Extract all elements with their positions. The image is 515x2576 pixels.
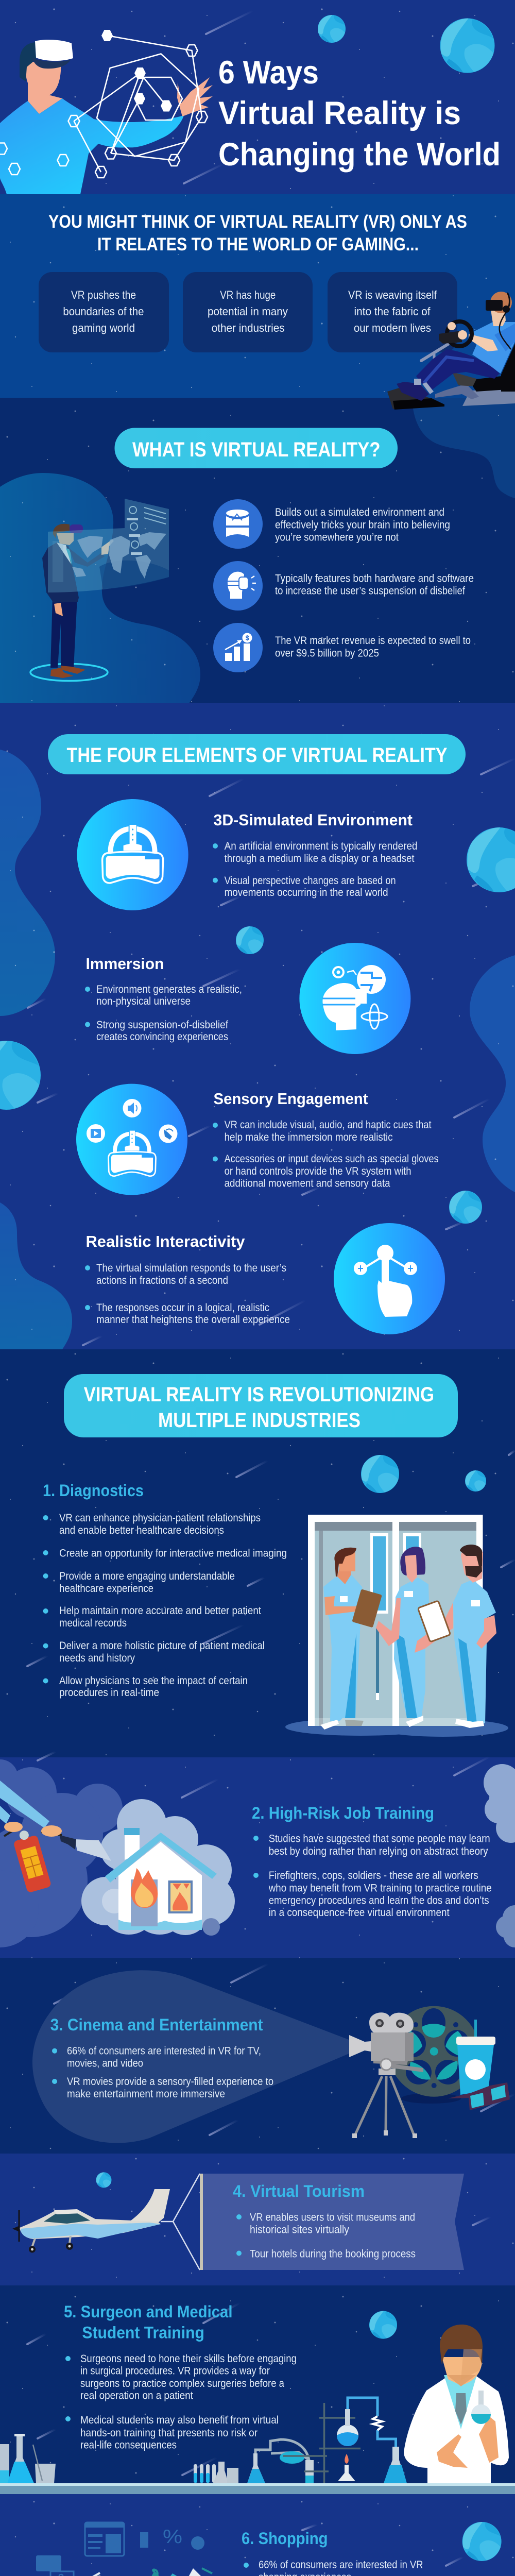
section: diagnostics: procedures in real-time <box>59 1687 159 1699</box>
section: diagnostics: Provide a more engaging understandable <box>59 1570 235 1582</box>
section: diagnostics <box>43 1481 287 1699</box>
section: high-risk job training: in a consequence-free virtual environment <box>269 1907 450 1919</box>
panel: card gaming <box>39 272 169 352</box>
section: shopping <box>242 2529 451 2576</box>
icon: planet tourism <box>96 2172 111 2188</box>
icon: planet diagnostics large <box>361 1455 399 1493</box>
text: hardware and software: to increase the user’s suspension of disbelief <box>275 585 465 597</box>
panel: cinema background <box>0 1958 515 2154</box>
text: simulated environment: you’re somewhere you’re not <box>275 532 399 544</box>
background blob: left of what is VR <box>0 473 200 703</box>
heading: you might think <box>48 212 467 255</box>
panel: job training background <box>0 1757 515 1958</box>
icon: immersion circle <box>299 943 410 1054</box>
panel: card modern lives: our modern lives <box>354 321 431 334</box>
section: diagnostics: and enable better healthcare decisions <box>59 1524 224 1536</box>
panel: virtual tourism banner <box>200 2174 464 2270</box>
panel: intro background <box>0 194 515 398</box>
icon: planet large hero <box>440 19 494 73</box>
element: immersion: Immersion <box>85 955 164 973</box>
background blob: lower left of four elements <box>0 1202 72 1349</box>
section: surgeon and medical student training: Medical students may also benefit from virtual <box>80 2414 279 2426</box>
element: 3D-simulated environment: An artificial environment is typically rendered <box>225 840 418 852</box>
section: surgeon and medical student training: hands-on training that presents no risk or <box>80 2427 258 2439</box>
background blob: upper left of four elements <box>0 750 55 1016</box>
section: diagnostics: medical records <box>59 1617 127 1629</box>
panel: hero background <box>0 0 515 194</box>
element: realistic interactivity <box>85 1232 290 1326</box>
icon: revenue bars badge: $ <box>246 634 250 642</box>
panel: card industries: VR has huge <box>220 289 276 301</box>
icon: revenue bars badge <box>213 623 263 672</box>
title: 6 Ways <box>218 55 319 91</box>
text: hardware and software: Typically features both hardware and software <box>275 573 474 584</box>
text: market revenue: The VR market revenue is expected to swell to <box>275 635 471 647</box>
background blob: top right of what is VR <box>412 398 515 498</box>
section: high-risk job training: 2. High-Risk Job Training <box>252 1804 434 1822</box>
section: surgeon and medical student training: surgeons to practice complex surgeries before a <box>80 2378 284 2389</box>
section: diagnostics: Help maintain more accurate and better patient <box>59 1605 261 1617</box>
section: diagnostics: needs and history <box>59 1652 135 1664</box>
heading pill: revolutionizing industries: MULTIPLE INDUSTRIES <box>158 1409 360 1432</box>
section: high-risk job training: who may benefit from VR training to practice routine <box>268 1883 492 1894</box>
heading pill: four elements <box>48 734 466 774</box>
heading: you might think: IT RELATES TO THE WORLD OF GAMING... <box>97 234 419 255</box>
background clouds right <box>484 1764 515 1947</box>
element: realistic interactivity: The responses occur in a logical, realistic <box>96 1302 269 1314</box>
icon: planet shopping <box>462 2522 502 2561</box>
icon: planet left lower <box>0 1041 41 1110</box>
icon: head with headset badge <box>213 561 263 611</box>
text: simulated environment: Builds out a simulated environment and <box>275 506 444 518</box>
heading pill: revolutionizing industries: VIRTUAL REALITY IS REVOLUTIONIZING <box>84 1383 434 1406</box>
panel: card gaming: gaming world <box>72 321 135 334</box>
text: hardware and software <box>275 573 474 597</box>
section: shopping: 6. Shopping <box>242 2529 328 2548</box>
element: immersion: Environment generates a realistic, <box>96 984 242 995</box>
panel: card industries: other industries <box>212 321 285 334</box>
section: surgeon and medical student training <box>64 2302 297 2451</box>
heading pill: what is VR: WHAT IS VIRTUAL REALITY? <box>132 438 380 461</box>
icon: planet small centre <box>236 926 264 954</box>
element: 3D-simulated environment: through a medium like a display or a headset <box>225 853 415 865</box>
icon: VR panorama badge <box>213 499 263 549</box>
section: shopping: 66% of consumers are interested in VR <box>259 2559 423 2571</box>
element: sensory engagement: help make the immersion more realistic <box>225 1131 393 1143</box>
panel: what is VR background <box>0 398 515 703</box>
section: high-risk job training <box>252 1804 492 1919</box>
element: 3D-simulated environment: 3D-Simulated Environment <box>213 811 413 829</box>
element: realistic interactivity: Realistic Interactivity <box>85 1232 245 1250</box>
element: immersion <box>85 955 242 1043</box>
section: cinema and entertainment: 3. Cinema and Entertainment <box>50 2015 263 2034</box>
element: 3D-simulated environment: movements occurring in the real world <box>225 887 388 899</box>
heading pill: four elements: THE FOUR ELEMENTS OF VIRTUAL REALITY <box>67 744 448 767</box>
background cloud left <box>0 1759 123 1947</box>
icon: planet diagnostics small <box>465 1470 486 1492</box>
element: sensory engagement: Accessories or input devices such as special gloves <box>225 1153 439 1165</box>
element: sensory engagement: VR can include visual, audio, and haptic cues that <box>225 1119 432 1131</box>
element: sensory engagement: Sensory Engagement <box>213 1090 368 1108</box>
illustration: gamer in racing rig <box>387 292 515 410</box>
element: 3D-simulated environment: Visual perspective changes are based on <box>225 875 396 887</box>
section: diagnostics: Create an opportunity for interactive medical imaging <box>59 1547 287 1559</box>
panel: virtual tourism banner: historical sites virtually <box>250 2224 349 2236</box>
projector light beam <box>32 1970 350 2143</box>
panel: four elements background <box>0 703 515 1349</box>
icon: 3D headset circle <box>77 799 188 910</box>
icon: planet small hero <box>318 15 346 43</box>
element: immersion: non-physical universe <box>96 995 191 1007</box>
section: high-risk job training: Firefighters, cops, soldiers - these are all workers <box>269 1870 478 1882</box>
illustration: faint shopping icons <box>36 2522 204 2576</box>
element: immersion: creates convincing experiences <box>96 1031 228 1043</box>
section: surgeon and medical student training: Surgeons need to hone their skills before engaging <box>80 2353 297 2365</box>
text: market revenue: over $9.5 billion by 2025 <box>275 648 379 659</box>
banner rope <box>161 2174 200 2270</box>
section: surgeon and medical student training: 5. Surgeon and Medical <box>64 2302 233 2321</box>
background blob: right of four elements <box>470 955 515 1192</box>
illustration: faint shopping icons: % <box>163 2526 182 2548</box>
illustration: airplane <box>12 2189 170 2252</box>
section: surgeon and medical student training: real operation on a patient <box>80 2389 193 2402</box>
illustration: shopping cart with gifts <box>115 2568 222 2576</box>
panel: card modern lives: into the fabric of <box>354 305 431 318</box>
text: market revenue <box>275 635 471 659</box>
section: surgeon and medical student training: in surgical procedures. VR provides a way for <box>80 2365 270 2377</box>
panel: surgeon background <box>0 2285 515 2494</box>
illustration: burning house with extinguisher <box>0 1781 235 1936</box>
panel: card gaming: boundaries of the <box>63 305 144 318</box>
panel: shopping background <box>0 2494 515 2576</box>
panel: virtual tourism banner: VR enables users to visit museums and <box>250 2211 415 2223</box>
panel: card modern lives: VR is weaving itself <box>348 289 437 301</box>
title: Virtual Reality is <box>218 95 461 131</box>
section: surgeon and medical student training: real-life consequences <box>80 2439 177 2451</box>
panel: industries background <box>0 1349 515 1757</box>
section: diagnostics: 1. Diagnostics <box>43 1481 144 1500</box>
illustration: man with holographic world map <box>30 499 169 681</box>
illustration: film camera, reel, drink and glasses <box>349 2006 510 2138</box>
heading pill: revolutionizing industries <box>64 1374 458 1437</box>
section: diagnostics: Deliver a more holistic picture of patient medical <box>59 1640 265 1652</box>
element: realistic interactivity: actions in fractions of a second <box>96 1275 228 1286</box>
element: 3D-simulated environment <box>213 811 418 899</box>
illustration: man in VR headset with hexagon network <box>0 30 213 194</box>
icon: planet right of element one <box>467 827 515 892</box>
section: diagnostics: Allow physicians to see the impact of certain <box>59 1675 248 1687</box>
section: cinema and entertainment: make entertainment more immersive <box>67 2088 225 2100</box>
panel: card gaming: VR pushes the <box>71 289 136 301</box>
icon: sensory circle <box>76 1084 187 1195</box>
section: high-risk job training: best by doing rather than relying on abstract theory <box>269 1845 488 1857</box>
illustration: lab table with glassware <box>0 2398 515 2494</box>
panel: virtual tourism banner: Tour hotels during the booking process <box>250 2248 416 2260</box>
section: cinema and entertainment: movies, and video <box>67 2058 143 2070</box>
icon: touch interaction circle <box>334 1223 445 1334</box>
panel: card industries <box>183 272 313 352</box>
section: cinema and entertainment: VR movies provide a sensory-filled experience to <box>67 2076 273 2088</box>
element: sensory engagement: or hand controls provide the VR system with <box>225 1165 411 1177</box>
icon: planet surgeon <box>369 2311 397 2339</box>
element: sensory engagement: additional movement and sensory data <box>225 1178 390 1190</box>
illustration: scientist holding flask <box>404 2325 509 2483</box>
heading pill: what is VR <box>114 428 398 468</box>
element: sensory engagement <box>213 1090 439 1190</box>
element: realistic interactivity: manner that heightens the overall experience <box>96 1314 290 1326</box>
icon: planet small right <box>449 1191 482 1224</box>
illustration: doctors at doorway <box>285 1515 508 1737</box>
panel: card industries: potential in many <box>208 305 288 318</box>
panel: card modern lives <box>328 272 457 352</box>
panel: virtual tourism banner: 4. Virtual Tourism <box>233 2182 365 2200</box>
section: diagnostics: VR can enhance physician-patient relationships <box>59 1512 261 1524</box>
section: diagnostics: healthcare experience <box>59 1583 153 1595</box>
element: realistic interactivity: The virtual simulation responds to the user’s <box>96 1262 286 1274</box>
panel: tourism background <box>0 2154 515 2285</box>
element: immersion: Strong suspension-of-disbelief <box>96 1019 228 1031</box>
text: simulated environment <box>275 506 450 544</box>
section: surgeon and medical student training: Student Training <box>82 2324 204 2342</box>
text: simulated environment: effectively tricks your brain into believing <box>275 519 450 531</box>
illustration: hand with curved arrow <box>32 2573 100 2576</box>
section: cinema and entertainment <box>50 2015 273 2100</box>
title <box>218 55 501 173</box>
section: high-risk job training: Studies have suggested that some people may learn <box>269 1833 490 1844</box>
section: cinema and entertainment: 66% of consumers are interested in VR for TV, <box>67 2045 261 2057</box>
section: high-risk job training: emergency procedures and learn the dos and don’ts <box>269 1895 489 1907</box>
